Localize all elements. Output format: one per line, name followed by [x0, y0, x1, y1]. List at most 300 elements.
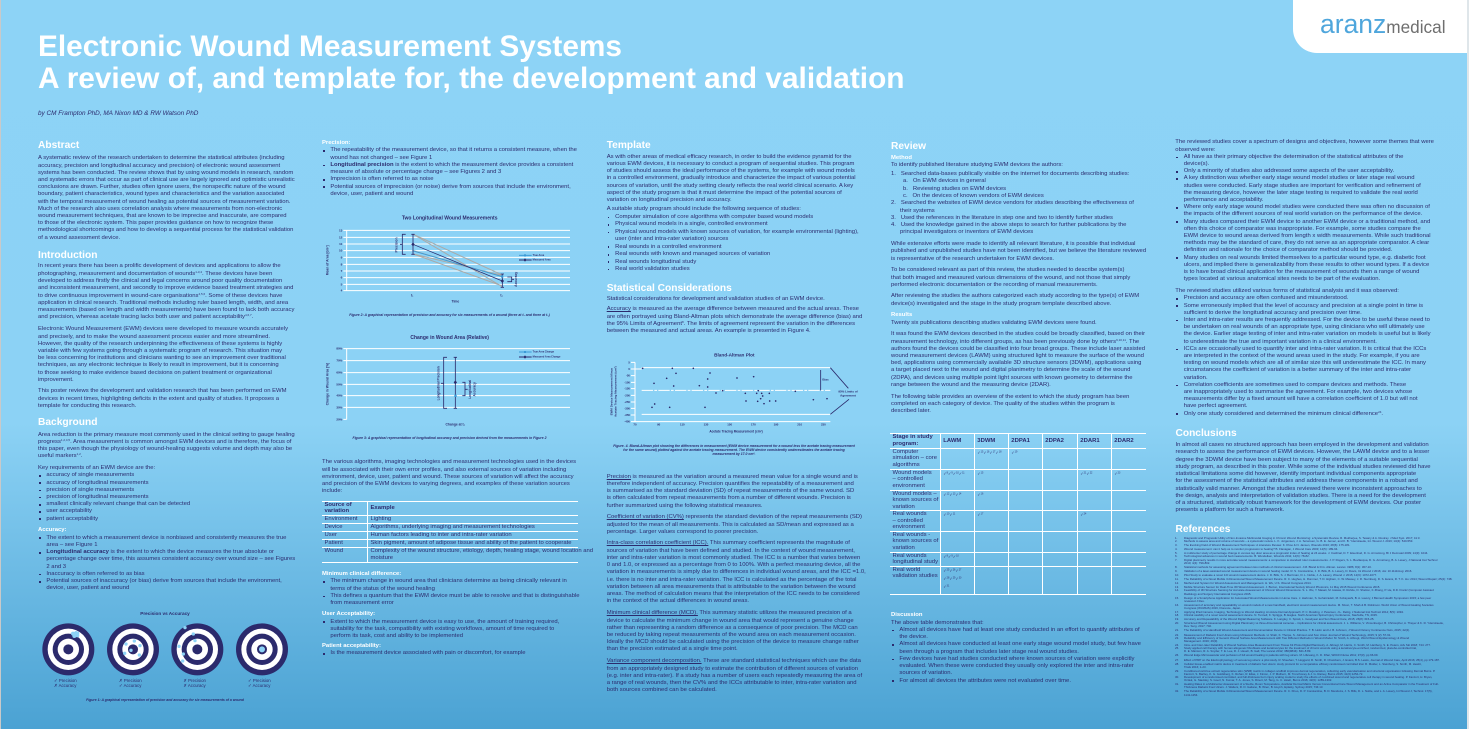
statistical analysis observations list: Precision and accuracy are often confused and misunderstood.	[1184, 295, 1348, 301]
introduction paragraph 1: application in clinical research. Traditional methods including ruler based length, width, and area	[38, 300, 288, 306]
longitudinal precision label: Longitudinal Precision	[437, 366, 441, 400]
patient acceptability section: Is the measurement device associated with pain or discomfort, for example	[330, 650, 526, 656]
review paragraph: relevance: To be considered relevant as part of this review, the studies needed to describe system(s)	[891, 267, 1124, 273]
references list: A multicenter study of percentage change in venous leg ulcer area as a prognostic index of healing at 24 weeks. J. Cardinal, D. T. Eisenbud, D. G. Armstrong, Br J Dermatol 2009; 14(3): 1044.	[1184, 551, 1428, 555]
introduction paragraph 1: developed to address firstly the clinical and legal concerns around poor quality documentation	[38, 278, 282, 284]
user acceptability section	[322, 611, 559, 639]
references list: 20.	[1175, 621, 1179, 625]
abstract text: of a wound assessment device.	[38, 235, 120, 241]
limits of agreement label	[838, 390, 858, 398]
references list: 29.	[1175, 668, 1179, 672]
references list: Wound Edge Microvascular and perfusion of full wound healing in patients with leg ulcers. M. Lillevang, K. D. Dhar, WOCN Nurse 2011; 37(3); pp 66-69.	[1184, 653, 1378, 657]
precision section: The repeatability of the measurement device, so that it returns a consistent measure, when the	[330, 147, 577, 153]
references list: Trials 2016; 1-23.	[1184, 664, 1206, 668]
table: sources of variation: Device	[324, 524, 343, 530]
limits of agreement label: 95% Limits of	[838, 390, 858, 394]
table introduction: The following table provides an overview of the extent to which the study program has been	[891, 394, 1129, 400]
table: study program by device: ✓17	[977, 512, 983, 517]
references list: 23.	[1175, 636, 1179, 640]
table: study program by device: Computer	[892, 449, 918, 455]
discussion section: Few devices have had studies conducted where known sources of variation were explicitly	[899, 656, 1134, 662]
y axis title: Mean of Area [cm²]	[326, 245, 330, 275]
table: study program by device: 2DAR1	[1080, 438, 1100, 444]
conclusions text: degree the 3DWM device have been subject to many of the elements of a suitable sequential	[1176, 457, 1418, 463]
left edge strip	[0, 0, 1, 729]
y axis labels: 50%	[336, 382, 343, 386]
references list: Digital planimetry results in more accurate wound measurements: a comparison to standard ruler measurements. J. P. Rogers, S. L. Bevilacqua, D. G. Armstrong, B. A. Lavery, J National Inst Technol	[1184, 558, 1437, 562]
statistical analysis observations list: are interpreted in the context of the wound areas used in the study. For example, if you are	[1184, 353, 1420, 359]
references list: 18.	[1175, 613, 1179, 617]
y axis title: EWM Device Measurement Minus	[610, 368, 614, 415]
introduction paragraph 1: and precision, whereas acetate tracing lacks both user and patient acceptability4,6,7.	[38, 314, 253, 320]
table: study program by device: ✓12✓13✓14	[943, 492, 961, 497]
references list: Technological advances in wound bed measurements. B. Wendelken, Wounds 2011; 14(6): 78-82.	[1184, 554, 1310, 558]
table: study program by device: ✓24	[1080, 512, 1086, 517]
abstract text: systems has been conducted. The review shows that by using wound models in research, random	[38, 170, 293, 176]
statistical analysis observations list: Correlation coefficients are sometimes used to compare devices and methods. These	[1184, 382, 1406, 388]
template paragraph	[606, 154, 856, 203]
references list: Ozdek, G. Stavisky, S. Goerl, N. Kumar, T. A. Jones, S. Rinert, M. Tang, G. C. Hsieh, Burns 2016; 42(6): 1289-1302.	[1184, 678, 1332, 682]
variance component definition: a range of real wounds, then the CV% and the ICCs attributable to inter, intra-rater variation and	[607, 680, 857, 686]
conclusions text: In almost all cases no structured approach has been employed in the development and validation	[1176, 442, 1429, 448]
y axis labels: 5	[341, 282, 343, 286]
figure 1 caption: Figure 1: A graphical representation of precision and accuracy for six measurements of a wound	[86, 698, 244, 702]
statistical analysis observations list: are inappropriately used to summarise the agreement. For example, two devices whose	[1184, 389, 1412, 395]
legend	[519, 351, 561, 359]
y axis labels: -150	[624, 387, 630, 391]
review paragraph: categorisation: device(s) investigated and the stage in the study program template described above.	[891, 301, 1111, 307]
key requirements list	[38, 465, 190, 522]
x axis labels: 110	[680, 423, 685, 427]
template study sequence list: Real wounds longitudinal study	[615, 259, 696, 265]
table: sources of variation: Source of	[324, 502, 352, 508]
figure 4 title: Bland-Altman Plot	[714, 353, 755, 358]
title	[38, 30, 904, 95]
introduction paragraph 2: be less concerning for institutions and clinicians wanting to see an improvement over traditional	[38, 355, 286, 361]
abstract text: with the temporal measurement of wound healing as potential sources of measurement variation.	[38, 199, 290, 205]
intra-class correlation definition	[606, 540, 866, 604]
references list: Wound measurement: can it help us to monitor progression to healing? B. Flanagan, J Wound Care 2003; 12(5): 189-94.	[1184, 547, 1338, 551]
y axis labels: 60%	[336, 371, 343, 375]
precision definition: further summarized using the following statistical measures.	[607, 502, 763, 508]
themes list: All have as their primary objective the determination of the statistical attributes of the	[1184, 154, 1403, 160]
references list: Cellular tissue-enabled matrix device in treatment of diabetic foot ulcers: study protocol for a comparative efficacy randomised controlled trial. R. Mulder, L. Steinberg, S. Smith, M. Hewitt,	[1184, 662, 1422, 666]
precision definition: is summarised as the standard deviation (SD) of repeat measurements of the same wound. SD	[607, 488, 854, 494]
right edge strip	[1467, 0, 1469, 729]
table: study program by device: longitudinal study	[892, 559, 938, 565]
references list: Management. 2016; 49(3).	[1184, 639, 1218, 643]
coefficient of variation definition	[606, 514, 862, 535]
table introduction: completed on each category of device. The quality of the studies within the program is	[891, 401, 1115, 407]
target 3	[171, 623, 223, 675]
references list: Conditioned cell-free extract regenerative skin (WSB) matrix in collagen scaffold improves dermal regeneration, collecting early vascularisation and structural organisation following Dermal Burns. P.	[1184, 668, 1435, 672]
references list: Fanzort, S. Bartley, K. G. Goldsberg, K. Rohan, R. Elias, J. Kinion, J. P. Mulhern, M. Tronchoney & J. G. Rainey, Burns 2015; 41(6):1254-72.	[1184, 672, 1363, 676]
themes list: observed were:	[1175, 147, 1216, 153]
y axis labels: -100	[624, 380, 630, 384]
y axis labels: 4	[341, 289, 343, 293]
y axis labels: 10	[339, 249, 343, 253]
precision definition	[606, 474, 858, 508]
review method section: 1. Searched data-bases publically visible on the internet for documents describing studies:	[891, 171, 1129, 177]
template study sequence list: Physical wound models in a single, controlled environment	[615, 221, 768, 227]
references list: 16.	[1175, 602, 1179, 606]
statistical analysis observations list: testing on wound models which are all of similar size this will underestimate the ICC. In many	[1184, 360, 1426, 366]
x axis labels: 90	[657, 423, 661, 427]
references list: 9.	[1175, 569, 1177, 573]
references list: 4.	[1175, 547, 1177, 551]
table: study program by device: simulation – core	[892, 455, 937, 461]
introduction paragraph 3: template for conducting this research.	[38, 403, 136, 409]
key requirements list: accuracy of single measurements	[46, 472, 134, 478]
axes and reference lines	[631, 362, 830, 422]
introduction paragraph 3	[38, 388, 287, 409]
x axis labels: t₂	[500, 293, 503, 297]
table introduction: described later.	[891, 408, 931, 414]
abstract text: boundary, patient characteristics, wound types and characteristics and the variation associated	[38, 191, 284, 197]
table: study program by device: validation studies	[892, 573, 938, 579]
introduction paragraph 1	[38, 263, 294, 320]
references list: 22.	[1175, 633, 1179, 637]
coefficient of variation definition: adjusted for the mean of all measurements. This is calculated as SD/mean and expressed as a	[607, 522, 854, 528]
x axis title: Change at t₂	[446, 423, 466, 427]
themes list: definition and rationale for the choice of comparator method should be provided.	[1184, 247, 1392, 253]
template study sequence list: Physical wound models with known sources of variation, for example environmental (lighting),	[615, 229, 859, 235]
intra-class correlation definition: areas. The method of calculation means that the interpretation of the ICC needs to be considered	[607, 591, 860, 597]
references list: 6.	[1175, 554, 1177, 558]
introduction paragraph 2	[38, 326, 288, 383]
template study sequence list: user (inter and intra-rater variation) sources	[615, 236, 728, 242]
references list: Congress (WUWHS) 2016, Florence, Japan.	[1184, 606, 1241, 610]
review method section: their systems	[900, 208, 935, 214]
table: study program by device: ✓15	[977, 471, 983, 476]
themes list: Where only early stage wound model studies were conducted there was often no discussion of	[1184, 204, 1430, 210]
review paragraph: search limits	[891, 241, 1146, 262]
references list: 1141-1154.	[1184, 692, 1198, 696]
precision section: measure of absolute or percentage change – see Figures 2 and 3	[330, 169, 501, 175]
review paragraph: search limits: is representative of the research undertaken for EWM devices.	[891, 256, 1054, 262]
statistical analysis observations list: the device. Earlier stage testing of inter and intra-rater variation on models is useful but is likely	[1184, 331, 1431, 337]
results paragraph: It was found the EWM devices described in the studies could be broadly classified, based on their	[891, 331, 1145, 337]
bias arrow	[819, 370, 822, 390]
references list: Applying iPad Camera, Imaging, Technology to Wound Healing: An Acute Dermal Approach. P. C. Rowling, J. Petersen, J.L. Rettig, J National Inst Technol 2014; 8(5): 1094.	[1184, 610, 1404, 614]
table: study program by device: known sources of	[892, 538, 938, 544]
conclusions text: study program, as described in this poster. While some of the individual studies reviewed did have	[1176, 464, 1431, 470]
measured area line	[413, 244, 502, 281]
accuracy section: Accuracy:	[38, 527, 66, 533]
longitudinal accuracy label: Accuracy	[472, 382, 476, 396]
variance component definition: both sources combined can be calculated.	[607, 687, 717, 693]
accuracy definition: the 95% Limits of Agreement8. The limits of agreement represent the variation in the differences	[607, 320, 855, 327]
statistical analysis observations list	[1175, 288, 1431, 417]
themes list: Many studies on real wounds limited themselves to a particular wound type, e.g. diabetic foot	[1184, 255, 1426, 261]
introduction paragraph 2: improvement.	[38, 377, 74, 383]
authors byline: by CM Frampton PhD, MA Nixon MD & RW Watson PhD	[38, 110, 198, 117]
table: study program by device: ✓21✓22	[1080, 471, 1092, 476]
review paragraph: categorisation	[891, 293, 1139, 307]
references list: 27.	[1175, 658, 1179, 662]
figure 4 caption: measurement by 17.0 cm².	[712, 452, 756, 456]
variation sources paragraph: and precision of the EWM devices to varying degrees, and examples of these variation sources	[322, 481, 570, 487]
references list: 2010; 4(4): 799-802.	[1184, 560, 1210, 564]
background paragraph: useful markers1,2.	[38, 452, 82, 459]
references list: The Reliability of a Novel Mobile 3-Dimensional Wound Measurement Device. R. C. Hughes, H. Rommer, T. D. Higham, C. W. Massey, J. R. Sternberg, D. S. Evans, R. T. K. Ho: 2014; Wound Repair; 25(4): 748.	[1184, 577, 1452, 581]
references list: Reliability and Efficiency of Generic Wound Surface Area Measurement with Two Different Methods in Wound Model. M. Smith, A. Albregt, World Wound Epidemiology & Wound	[1184, 636, 1409, 640]
references list: Design of a Smartphone Application for Automated Wound Measurements in Home Care. J. Hartman, S. Goharzadeh, M. Kobayashi, B. A. Lavery, J Biomed Health Symposium 2015; a few peer	[1184, 596, 1431, 600]
review method section: 4. Used the knowledge gained in the above steps to search for further publications by the	[891, 222, 1126, 228]
references list: Assessment of accuracy and repeatability on wound models of a new handheld, electronic wound measurement device. M. Nixon, T. Shah & B. Robinson. World Union of Wound Healing Societies	[1184, 602, 1434, 606]
precision section: Precision:	[322, 140, 350, 146]
data points	[642, 368, 828, 408]
y axis labels: 12	[339, 235, 343, 239]
introduction paragraph 2: and precisely, and to make the wound assessment process easier and more streamlined.	[38, 334, 270, 340]
review method section	[891, 155, 1134, 235]
references list	[1175, 536, 1447, 698]
references list: Accuracy and Repeatability of the Wound Digital Measuring Software. K. Langley, C. Spratt, L. Goodyear and Son Wound Care, 2015; 26(8): 615-25.	[1184, 617, 1374, 621]
key requirements list: smallest clinically relevant change that can be detected	[46, 501, 190, 507]
table: sources of variation: Wound	[324, 548, 343, 554]
review paragraph: relevance	[891, 267, 1130, 288]
grid lines	[343, 230, 570, 291]
grid lines	[343, 349, 570, 419]
minimum clinical difference section: This defines a quantum that the EWM device must be able to resolve and that is distinguishable	[330, 593, 580, 599]
discussion section: For almost all devices the attributes were not evaluated over time.	[899, 678, 1071, 684]
conclusions text: for the assessment of the statistical attributes and address these components in a robust and	[1176, 478, 1418, 484]
table: study program by device: Real wounds	[892, 553, 927, 559]
figure 3 title: Change in Wound Area (Relative)	[410, 335, 489, 341]
figure 3: change in wound area chart	[326, 335, 570, 427]
minimum clinical difference definition: Minimum clinical difference (MCD). This summary statistic utilizes the measured precision of a	[607, 610, 852, 616]
longitudinal accuracy label	[468, 380, 476, 399]
figure 3 caption: Figure 3: A graphical representation of longitudinal accuracy and precision derived from the measurements in Figure 2	[352, 436, 546, 440]
variation sources paragraph: environment, device, user, patient and wound. These sources of variation will affect the accuracy	[322, 474, 574, 480]
figure 2 caption: Figure 2: A graphical representation of precision and accuracy for six measurements of a wound (three at t₁ and three at t₂)	[349, 313, 550, 317]
y axis labels: 20%	[336, 417, 343, 421]
introduction paragraph 3: devices in recent times, highlighting deficits in the extent and quality of studies. It proposes a	[38, 396, 279, 402]
title: A review of, and template for, the development and validation	[38, 62, 904, 95]
y axis labels: 6	[341, 276, 343, 280]
key requirements list: patient acceptability	[46, 516, 98, 522]
abstract text: methodological shortcomings and how to develop a sequential process for the statistical validation	[38, 227, 293, 233]
variance component definition	[606, 658, 862, 693]
references list: Effect of PRP on the Electrophysiology of venous leg ulcers: a pilot study. R. Sheehan, T. Hoggard, R. Smith, R. Chambers, J. Evans, B.S. Lewis, Journal of Wound Care, April 2016; 25(4), pp 179-187.	[1184, 658, 1440, 662]
references list: 13.	[1175, 585, 1179, 589]
results paragraph	[891, 331, 1145, 388]
references list: Dev. Surg. 2017; 740.	[1184, 624, 1212, 628]
longitudinal accuracy label: Longitudinal	[468, 380, 472, 399]
references list: 17.	[1175, 610, 1179, 614]
discussion section: the device.	[899, 634, 928, 640]
table: study program by device: – controlled	[892, 518, 923, 524]
statistical analysis observations list: sufficient to derive the longitudinal accuracy and precision over time.	[1184, 310, 1362, 316]
table: study program by device: ✓8✓9✓10	[943, 554, 959, 559]
results section: Results	[891, 312, 912, 318]
introduction paragraph 2: Electronic Wound Measurement (EWM) devices were developed to measure wounds accurately	[38, 326, 288, 332]
accuracy definition: between the measured and actual areas. An example is presented in Figure 4.	[607, 328, 811, 334]
abstract text: to those of the electronic system. This paper provides guidance on how to recognize these	[38, 220, 273, 226]
themes list: Many studies compared their EWM device to another EWM device or a traditional method, and	[1184, 219, 1430, 225]
references list: 14.	[1175, 588, 1179, 592]
figure 1 title: Precision vs Accuracy	[140, 611, 190, 616]
figure 2 title: Two Longitudinal Wound Measurements	[402, 216, 498, 222]
key requirements list: precision of single measurements	[46, 487, 134, 493]
references list: 2.	[1175, 539, 1177, 543]
x axis labels: 70	[633, 423, 637, 427]
precision error bars	[400, 234, 514, 287]
references list: Study applied cell therapy with human allogeneic fibroblasts and keratinocytes for the treatment of chronic wounds using a keratinocyte-enriched, randomized, placebo-controlled trial,	[1184, 646, 1417, 650]
references list: The Evolving Field of Wound Measurement Techniques: A Literature Review. K. Khoo & N. Jansen, Wounds 2016; 28(6): 175-181.	[1184, 543, 1350, 547]
table: sources of variation: Patient	[324, 540, 343, 546]
target 1	[42, 623, 94, 675]
heading: abstract: Abstract	[38, 140, 79, 151]
references list: 10.	[1175, 573, 1179, 577]
discussion section: Almost all devices have conducted at least one early stage wound model study, but few have	[899, 641, 1141, 647]
references list: 3.	[1175, 543, 1177, 547]
minimum clinical difference section	[322, 571, 580, 606]
statistical analysis observations list: be undertaken on real wounds of an appropriate type, using clinicians who will ultimately use	[1184, 324, 1425, 330]
results section	[891, 312, 1097, 326]
y axis labels: -400	[624, 420, 630, 424]
conclusions text: statistically valid manner. Amongst the studies reviewed there were inconsistent approaches to	[1176, 486, 1422, 492]
logo panel	[1293, 0, 1469, 53]
discussion section: The above table demonstrates that:	[891, 620, 984, 626]
template paragraph: aspect of the study program is that it must determine the impact of the potential sources of	[607, 190, 842, 196]
abstract text: accuracy, precision and longitudinal accuracy and precision) of electronic wound assessment	[38, 163, 280, 169]
themes list: is to have broad clinical application for the measurement of wounds then a range of wound	[1184, 269, 1419, 275]
accuracy definition: are often portrayed using Bland-Altman plots which demonstrate the average difference (bias) and	[607, 314, 862, 320]
abstract text: wound measurement techniques, that are known to be imprecise and inaccurate, are compared	[38, 213, 287, 219]
minimum clinical difference definition: Ideally the MCD should be calculated using the precision of the device to measure change rather	[607, 639, 859, 645]
references list: Statistical methods for assessing agreement between two methods of clinical measurement. J.M. Bland & D.G. Altman. Lancet. 1986; 8(1): 307-10.	[1184, 565, 1372, 569]
review method section: 2. Searched the websites of EWM device vendors for studies describing the effectiveness of	[891, 200, 1134, 206]
statistical analysis observations list: have perfect agreement.	[1184, 403, 1248, 409]
variance component definition: (e.g. inter and intra-rater). If a study has a number of users each repeatedly measuring the area of	[607, 673, 862, 679]
y axis labels: 30%	[336, 405, 343, 409]
x axis labels: 150	[727, 423, 732, 427]
data markers	[411, 242, 504, 283]
references list: Mobile Structure Sensor for Real-Time 3D Wound Assessment. J. Burton, International Society Wound Photonics, 11 May 2015 Wound Conference 2015.	[1184, 585, 1380, 589]
themes list: The reviewed studies cover a spectrum of designs and objectives, however some themes that were	[1175, 139, 1434, 145]
results paragraph: (2DPA), and devices using multiple point light sources with known geometry to determine the	[891, 375, 1133, 381]
legend: True Area	[533, 254, 545, 257]
themes list: ulcers, and implied there is generalizability from these results to other wound types. If a device	[1184, 262, 1429, 268]
y axis title: Change in Wound Area [%]	[326, 363, 330, 405]
target labels: ✓ Precision	[248, 678, 271, 683]
references list: Pilot Study to evaluate a novel 3-D wound measurement device. J. D. Bills, S. J. Berriman, D. L. Noble, J. A. Lavery, Wound J. 2015; 12(6): 1072-1077.	[1184, 573, 1377, 577]
minimum clinical difference definition	[606, 610, 859, 652]
minimum clinical difference definition: be reduced by taking repeat measurements of the wound area on each measurement occasion.	[607, 632, 856, 638]
variation sources paragraph: include:	[322, 488, 342, 494]
references list: 5.	[1175, 551, 1177, 555]
template study sequence list: Real wounds with known and managed sources of variation	[615, 251, 770, 257]
precision section: Potential sources of imprecision (or noise) derive from sources that include the environment,	[330, 184, 571, 190]
references list: Measurement of Diabetic Foot Ulcers using Ultrasonic Methods. H. Shah, K. Thorpe, S. Johnson and Son Union Journal of Wound Technology, 2015; 9 (2): 57-61.	[1184, 633, 1391, 637]
x axis labels: t₁	[411, 293, 414, 297]
y axis labels: -50	[626, 374, 630, 378]
results paragraph: bed, applications using commercially available 3D structure sensors (3DWM), applications using	[891, 360, 1141, 366]
table: study program by device: 2DPA1	[1011, 438, 1030, 444]
accuracy section: Potential sources of inaccuracy (or bias) derive from sources that include the environment,	[46, 578, 282, 584]
table: study program by device: variation	[892, 504, 915, 510]
variance component definition: from an appropriately designed study to estimate the contribution of different sources of variation	[607, 666, 858, 672]
results paragraph: authors found the devices could be classified into four broad groups. These include laser assisted	[891, 346, 1145, 352]
minimum clinical difference section: The minimum change in wound area that clinicians determine as being clinically relevant in	[330, 578, 567, 584]
conclusions text: statistical limitations some did however, identify important individual components appropriate	[1176, 471, 1416, 477]
precision section	[322, 140, 577, 197]
table: sources of variation: moisture	[370, 555, 393, 561]
minimum clinical difference definition: than the precision estimated at a single time point.	[607, 646, 738, 652]
references list: reviewed J Res.	[1184, 599, 1205, 603]
target 2	[107, 623, 159, 675]
figure 4 caption: Figure. 4. Bland-Altman plot showing the differences in measurement (EWM device measurement for a wound less the acetate tracing measurement	[613, 444, 855, 448]
heading: template: Template	[607, 140, 651, 151]
references list: 15.	[1175, 596, 1179, 600]
user acceptability section: perform its task, cost and ability to be implemented	[330, 633, 463, 639]
y axis labels	[339, 228, 343, 293]
y axis labels: 40%	[336, 394, 343, 398]
legend: Measured Area	[533, 259, 551, 262]
template study sequence list	[606, 206, 859, 272]
precision section: Longitudinal precision is the extent to which the measurement device provides a consistent	[330, 162, 573, 168]
table: study program by device: 3DWM	[977, 438, 995, 444]
review method section: Method	[891, 155, 912, 161]
references list: 30.	[1175, 675, 1179, 679]
figure 4: bland-altman plot	[610, 353, 858, 434]
x axis labels	[411, 293, 503, 304]
table: study program by device: Real world	[892, 567, 920, 573]
y axis labels: 11	[339, 242, 343, 246]
conclusions text: presents a platform for such a framework.	[1176, 507, 1284, 513]
review paragraph: categorisation: After reviewing the studies the authors categorized each study according to the type(s) of EWM	[891, 293, 1139, 299]
discussion section	[891, 612, 1141, 684]
background paragraph: progress1,2,4,5. Area measurement is common amongst EWM devices and is therefore, the focus of	[38, 438, 291, 445]
table: study program by device: LAWM	[943, 438, 961, 444]
heading: references: References	[1176, 524, 1230, 535]
table: sources of variation: Complexity of the wound structure, etiology, depth, healing stage, wound location and	[370, 548, 593, 554]
precision definition: therefore independent of accuracy. Precision quantifies the repeatability of a measurement and	[607, 481, 854, 487]
statistical analysis observations list: to underestimate the true and important variation in a clinical environment.	[1184, 339, 1377, 345]
references list: Diagnostic and Prognostic Utility of Non-Invasive Multimodal Imaging in Chronic Wound Monitoring: a Systematic Review. R. Mukherjee, S. Tewary & A. Routray. J Med Syst. 2017; 41:3.	[1184, 536, 1420, 540]
accuracy section: Longitudinal accuracy is the extent to which the device measures the true absolute or	[46, 549, 274, 555]
review method section: To identify published literature studying EWM devices the authors:	[891, 162, 1063, 168]
results paragraph: measurement technology, into different groups, as has been previously done by others9,10,11. The	[891, 338, 1139, 345]
abstract text: Much of the research also uses correlation analysis where measurements from non-electronic	[38, 206, 282, 212]
variation sources paragraph	[322, 459, 576, 494]
references list: 21.	[1175, 628, 1179, 632]
intra-class correlation definition: sources of variation that have been defined and studied. In the context of wound measurement,	[607, 548, 855, 554]
conclusions text: research to assess the performance of EWM devices. However, the LAWM device and to a lesser	[1176, 449, 1429, 455]
discussion section: Almost all devices have had at least one study conducted in an effort to quantify attributes of	[899, 627, 1140, 633]
precision label: Precision	[395, 238, 399, 252]
references list: Radiology and Surgery International Congress 2015.	[1184, 592, 1251, 596]
figure 2: two longitudinal wound measurements chart	[326, 216, 570, 304]
accuracy section: Inaccuracy is often referred to as bias	[46, 571, 145, 577]
variation sources paragraph: The various algorithms, imaging technologies and measurement technologies used in the devices	[322, 459, 576, 465]
abstract text: and systematic errors that occur as part of clinical use are largely ignored and optimistic unrealistic	[38, 177, 295, 183]
y axis labels: -350	[624, 413, 630, 417]
references list: 7.	[1175, 558, 1177, 562]
table: study program by device: environment	[892, 483, 925, 489]
table: study program by device: environment	[892, 524, 925, 530]
background paragraph: Area reduction is the primary measure most commonly used in the clinical setting to gauge healing	[38, 432, 295, 438]
heading: statistical considerations: Statistical Considerations	[607, 283, 732, 294]
y axis labels: 8	[341, 262, 343, 266]
table: study program by device: ✓10✓11	[943, 512, 955, 517]
y axis labels: 5	[628, 360, 630, 364]
limits of agreement label: Agreement	[840, 394, 856, 398]
key requirements list: precision of longitudinal measurements	[46, 494, 149, 500]
references list: Structured Wound Assessment using Digital Planimetry vs three-dimensional cameras – implications for clinical assessment. J. L. Williams, V. Vincenberger, B. Christopher, A. Thayer & K. R. Yderstraede,	[1184, 621, 1444, 625]
intra-class correlation definition: i.e. there is no inter and intra-rater variation. The ICC is calculated as the percentage of the total	[607, 577, 856, 583]
